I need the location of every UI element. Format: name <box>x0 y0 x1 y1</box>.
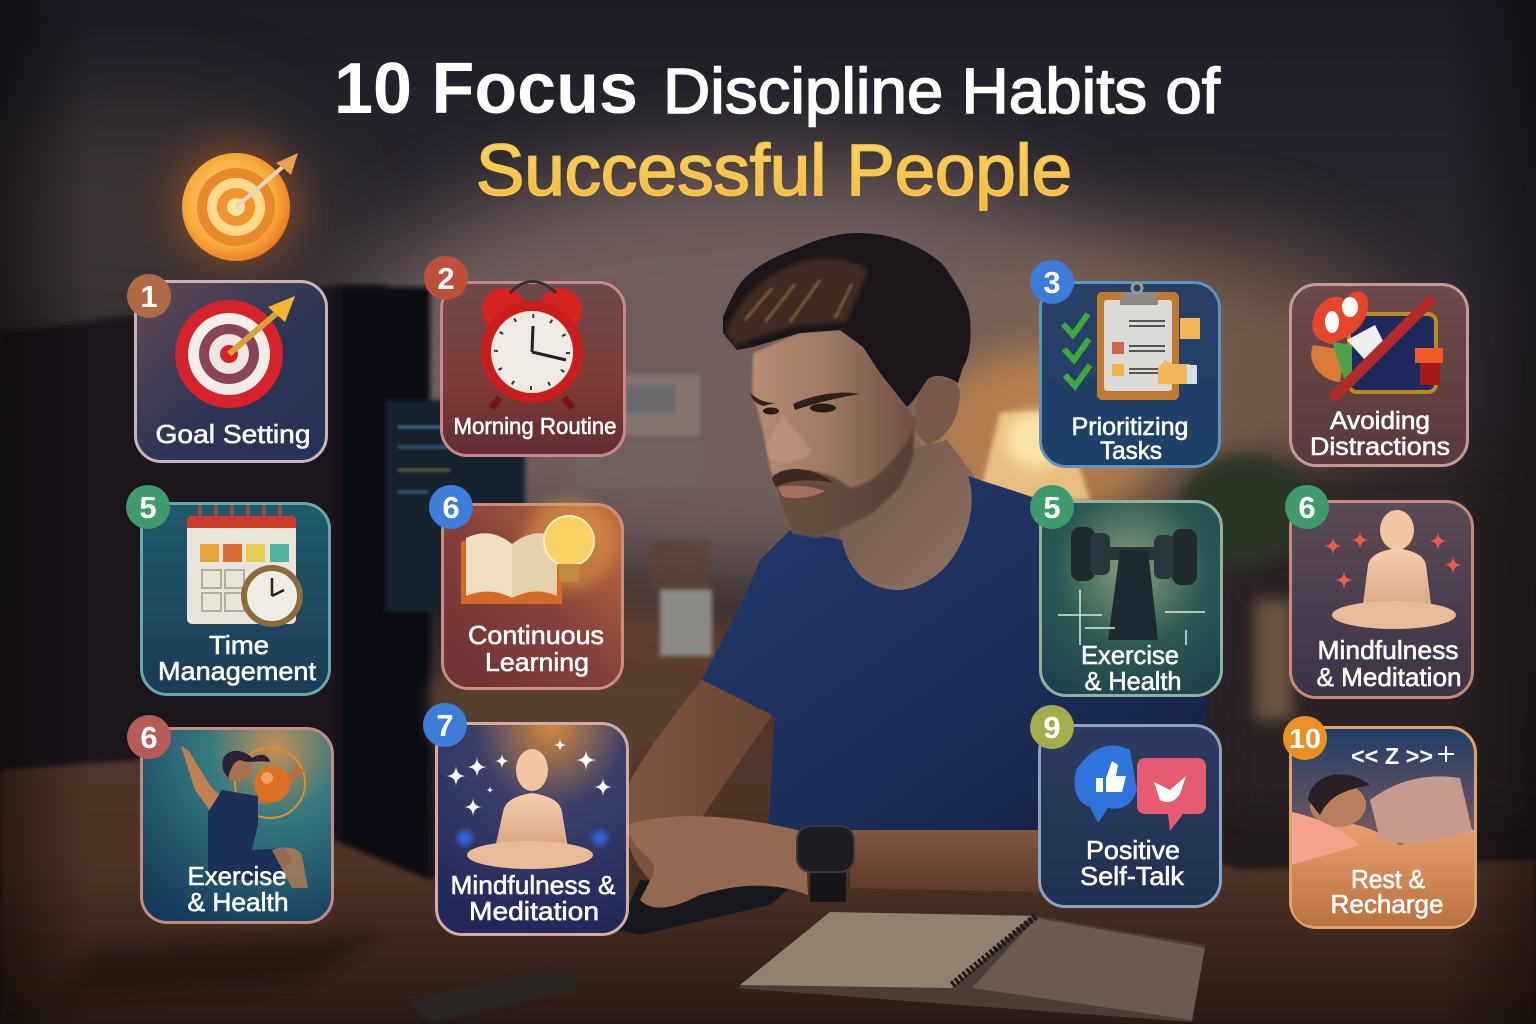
label: Goal Setting <box>156 419 310 449</box>
card 4: Avoiding Distractions: Distractions <box>1310 433 1450 461</box>
left arm <box>624 680 772 880</box>
badge: 5 <box>139 490 157 525</box>
icon: book and bulb <box>461 499 615 604</box>
badge: 9 <box>1043 710 1061 745</box>
t-shirt <box>702 476 1208 832</box>
card 10: Mindfulness and Meditation <box>423 703 628 934</box>
card 5: Time Management <box>126 485 330 694</box>
badge: 2 <box>437 261 455 296</box>
label: Prioritizing <box>1072 413 1188 441</box>
icon: target <box>175 296 295 408</box>
label: Mindfulness <box>1318 635 1458 665</box>
icon: clipboard <box>1063 283 1200 400</box>
card 12: Rest and Recharge: Recharge <box>1330 889 1444 919</box>
eyes and brows <box>750 393 860 414</box>
card 7: Exercise and Health <box>1030 485 1222 696</box>
desk <box>0 680 1536 1024</box>
badge <box>1285 485 1329 529</box>
card 11: Positive Self-Talk <box>1030 705 1220 906</box>
card 3: Prioritizing Tasks: Tasks <box>1100 437 1162 465</box>
label: Exercise <box>188 861 286 891</box>
badge <box>429 485 473 529</box>
label: Avoiding <box>1330 407 1430 435</box>
badge: 6 <box>140 720 158 755</box>
title line 2 gold: Successful People <box>476 131 1072 211</box>
badge <box>423 703 467 747</box>
label: Positive <box>1086 835 1180 865</box>
badge <box>424 256 468 300</box>
badge: 5 <box>1043 490 1061 525</box>
badge <box>1030 485 1074 529</box>
icon: meditating figure with stars <box>445 738 613 869</box>
badge <box>127 274 171 318</box>
monitor <box>0 285 525 890</box>
background: wall poster <box>575 375 700 487</box>
label: Exercise <box>1081 640 1179 670</box>
label: Rest & <box>1351 864 1425 894</box>
background: shelf object <box>650 540 712 656</box>
card 12: Rest and Recharge <box>1283 716 1476 928</box>
card 1: Goal Setting <box>127 274 326 462</box>
ear <box>915 376 960 445</box>
icon: sleeping man: << Z >> <box>1351 743 1433 769</box>
watch <box>797 826 854 902</box>
card 10: Mindfulness and Meditation: Meditation <box>469 896 599 926</box>
title line 1 bold: 10 Focus <box>334 49 638 129</box>
notebook <box>738 912 1205 1022</box>
badge: 6 <box>442 490 460 525</box>
badge <box>126 485 170 529</box>
card 6: Continuous Learning: Learning <box>485 647 589 677</box>
icon: dumbbell <box>1058 527 1205 645</box>
background: lamp <box>920 350 1160 530</box>
man <box>618 233 1208 935</box>
badge: 7 <box>436 708 454 743</box>
right forearm <box>850 830 1120 892</box>
card 8: Mindfulness and Meditation: & Meditation <box>1316 662 1462 692</box>
icon: chat bubbles <box>1075 746 1206 831</box>
card 9: Exercise and Health <box>127 715 332 922</box>
badge <box>1030 260 1074 304</box>
icon: meditating figure <box>1323 510 1463 629</box>
hair <box>723 233 971 407</box>
card 8: Mindfulness and Meditation <box>1285 485 1472 698</box>
card 6: Continuous Learning <box>429 485 622 688</box>
background: plant <box>1177 455 1313 720</box>
icon: glowing target <box>170 139 302 271</box>
card 3: Prioritizing Tasks <box>1030 260 1220 466</box>
hand <box>628 816 808 908</box>
card 7: Exercise and Health: & Health <box>1084 666 1182 696</box>
badge <box>1283 716 1327 760</box>
keyboard <box>618 880 790 935</box>
nose <box>767 415 811 462</box>
icon: calendar and clock <box>187 505 303 627</box>
label: Time <box>209 630 269 660</box>
hair highlight <box>726 258 868 346</box>
badge: 3 <box>1043 265 1061 300</box>
badge <box>127 715 171 759</box>
card 2: Morning Routine <box>424 256 624 456</box>
face <box>752 330 916 537</box>
icon: sleeping man <box>1292 743 1474 926</box>
icon: crossed out distractions <box>1311 291 1443 399</box>
neck <box>838 440 985 600</box>
badge <box>1030 705 1074 749</box>
badge: 1 <box>140 279 158 314</box>
card 5: Time Management: Management <box>158 656 317 686</box>
icon: athlete with ball <box>181 746 308 888</box>
card 11: Positive Self-Talk: Self-Talk <box>1080 861 1185 891</box>
label: Continuous <box>468 620 604 650</box>
title <box>334 49 1220 211</box>
badge: 6 <box>1298 490 1316 525</box>
moustache <box>772 469 834 487</box>
card 9: Exercise and Health: & Health <box>188 887 288 917</box>
icon: alarm clock <box>481 282 583 408</box>
badge: 10 <box>1289 723 1321 754</box>
label: Morning Routine <box>454 413 616 439</box>
label: Mindfulness & <box>450 870 616 900</box>
title line 1 regular: Discipline Habits of <box>663 55 1220 127</box>
card 4: Avoiding Distractions <box>1290 284 1468 466</box>
beard <box>772 430 913 537</box>
mouth <box>778 486 825 498</box>
